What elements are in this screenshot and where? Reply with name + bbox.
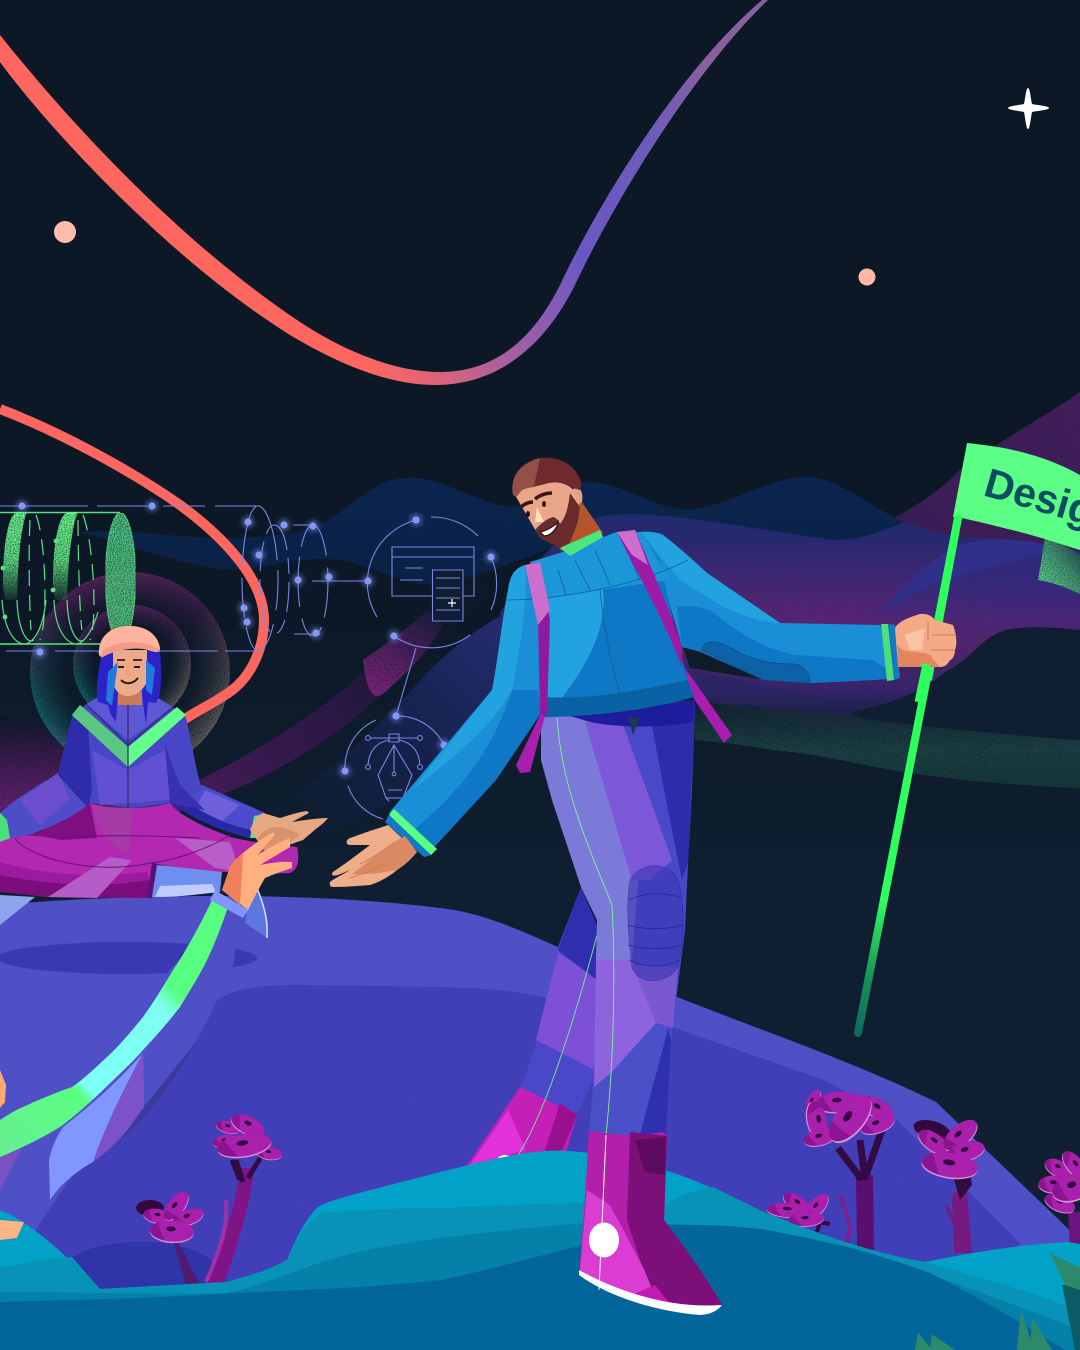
- man: head: [512, 458, 603, 556]
- boot highlight: [580, 1190, 655, 1298]
- grass spikes: [915, 1310, 1052, 1350]
- torso shade left: [58, 717, 92, 808]
- palm shade: [352, 836, 417, 874]
- front trouser leg: [541, 700, 695, 1135]
- green and cyan trailing ribbon: [0, 898, 228, 1157]
- boot dark back: [627, 1132, 722, 1307]
- right cuff edge: [888, 624, 900, 680]
- leg dark fold: [0, 875, 150, 898]
- yoke light: [530, 532, 670, 600]
- right strap highlight: [617, 530, 648, 565]
- mouth: [540, 522, 558, 536]
- guide lines: [0, 506, 320, 651]
- aura halos around the girl: [30, 572, 230, 750]
- fist shade: [897, 645, 940, 667]
- hair highlight: [106, 660, 155, 706]
- green haze band: [693, 703, 1080, 788]
- beard: [535, 493, 580, 548]
- grain on inner hill: [30, 985, 1020, 1350]
- foot speckle: [155, 884, 216, 897]
- eyebrow left: [520, 502, 533, 508]
- right sleeve top light: [640, 532, 780, 623]
- left sleeve: [389, 565, 545, 857]
- man: upper body: [385, 530, 900, 857]
- main violet-magenta wave: [500, 514, 1080, 735]
- sleeve light panel: [49, 1053, 144, 1200]
- fist highlight: [905, 628, 925, 650]
- left sleeve light: [412, 565, 526, 790]
- lower dark panel: [640, 1028, 671, 1135]
- eyebrow right: [535, 493, 552, 499]
- bright purple panel: [585, 722, 672, 880]
- back boot white dot: [495, 1155, 515, 1175]
- smile: [121, 678, 138, 683]
- back boot dark: [545, 1103, 577, 1155]
- girl: meditating figure: [0, 626, 328, 925]
- second coral ribbon: [0, 409, 264, 722]
- navy ridge: [80, 477, 905, 584]
- man: backpack strap lower: [685, 668, 732, 743]
- flag fold behind: [1038, 538, 1080, 594]
- back trouser leg: [520, 887, 597, 1115]
- left backpack strap: [525, 562, 550, 715]
- hip dark wedge: [25, 803, 97, 840]
- tree: large right: [802, 1086, 897, 1250]
- boot sole: [579, 1270, 722, 1315]
- dark pool on inner hill: [64, 1242, 216, 1298]
- teal foreground hills: [0, 1151, 1080, 1350]
- thumb lines: [350, 845, 392, 878]
- right sleeve: [640, 532, 900, 683]
- planet dot right: [858, 268, 876, 286]
- trees on right of hill: [766, 1086, 1080, 1253]
- inner halo: [73, 605, 191, 706]
- glowing nodes: [16, 500, 498, 778]
- bottom-left hand fragment upper: [0, 1070, 6, 1108]
- boot deepest shade: [635, 1137, 666, 1175]
- document icon: [432, 570, 463, 621]
- pink dome: [94, 805, 133, 855]
- wire cylinder ellipses: [242, 506, 278, 651]
- pen circle arcs: [345, 716, 444, 819]
- green stitch line: [557, 718, 614, 1135]
- white ankle button: [589, 1222, 619, 1258]
- lower left strap: [516, 715, 545, 773]
- boot toe magenta: [625, 1285, 675, 1310]
- face: [515, 482, 580, 548]
- foliage bottom right: [915, 1253, 1080, 1350]
- second person's reaching hand: [210, 832, 292, 938]
- hair: [512, 458, 581, 497]
- sleeve grey shadow: [120, 1043, 195, 1140]
- blue swell left of man: [265, 612, 520, 835]
- knee patch: [628, 866, 683, 981]
- palm and fingers: [330, 825, 417, 887]
- collar: [86, 680, 173, 740]
- back boot: [464, 1087, 577, 1170]
- leg light stripe: [48, 857, 132, 898]
- sleeve left purple fold: [0, 1148, 22, 1190]
- flag pole: [858, 518, 958, 1033]
- left cuff green: [389, 809, 437, 855]
- periwinkle wireframe diagram: [0, 506, 497, 819]
- seam lines: [505, 535, 688, 710]
- pen handle nodes: [366, 736, 422, 776]
- lilac right patch: [632, 965, 678, 1028]
- right backpack strap: [617, 530, 682, 668]
- hand shade: [222, 853, 243, 905]
- right cuff: [250, 814, 265, 838]
- dark hill right: [850, 627, 1080, 745]
- textured inner hill: [30, 985, 1020, 1350]
- coil outlines: [2, 600, 98, 644]
- back boot highlight: [470, 1110, 526, 1165]
- magenta wedge behind girl: [195, 575, 490, 800]
- back leg and boot: [464, 887, 597, 1175]
- dashed ellipses: [29, 515, 94, 640]
- background hills: [0, 392, 1080, 835]
- planet dot left: [54, 221, 76, 243]
- left foot panel: [0, 895, 35, 925]
- plant stem: [1062, 1285, 1080, 1350]
- white stitch: [599, 1135, 606, 1290]
- ankle: [147, 863, 158, 898]
- knee light: [175, 838, 240, 872]
- nose: [125, 664, 132, 675]
- leg base: [541, 700, 695, 1135]
- right cuff: [881, 624, 894, 681]
- tree: short left: [136, 1187, 206, 1285]
- lilac shin patch: [594, 960, 656, 1087]
- cuff light edge: [257, 888, 267, 938]
- left sleeve dark: [408, 690, 541, 857]
- hair back: [97, 648, 161, 725]
- left arm speckle: [20, 773, 70, 825]
- eyebrows: [117, 659, 142, 661]
- link line: [396, 648, 416, 716]
- green collar: [560, 530, 603, 556]
- front boot: [579, 1130, 722, 1315]
- pole over fist: [918, 664, 926, 702]
- left cuff: [0, 813, 10, 845]
- corner purple mountain: [880, 392, 1080, 640]
- chevron left shade: [72, 705, 128, 767]
- sleeve fold on hill: [0, 905, 235, 1240]
- spiky leaf top: [1050, 1253, 1080, 1290]
- man: hand on pole: [895, 614, 956, 702]
- top ribbon: coral to violet curve: [0, 0, 768, 385]
- left strap highlight: [525, 562, 550, 625]
- ear: [572, 488, 582, 506]
- left cuff band: [385, 815, 431, 857]
- zip line: [86, 700, 173, 852]
- torso jacket: [58, 704, 202, 808]
- cuff triangle: [245, 888, 268, 938]
- lower left magenta haze: [0, 715, 180, 830]
- finger lines: [928, 622, 955, 650]
- torso light panel: [540, 575, 604, 713]
- cylinder nodes: [1, 539, 58, 619]
- bottom-left hand fragment lower: [0, 1220, 24, 1240]
- inner lower blue: [589, 1023, 668, 1135]
- browser window icon: [392, 547, 474, 596]
- dark gap under arm: [682, 645, 765, 680]
- boot base: [579, 1130, 722, 1315]
- neck: [556, 495, 603, 551]
- green wireframe cylinder: [0, 512, 136, 644]
- trouser outline: [15, 835, 230, 867]
- right hand shade: [257, 827, 300, 853]
- hair highlight: [512, 458, 540, 497]
- magenta blob: [363, 610, 442, 696]
- outer halo: [30, 572, 230, 750]
- hat shade: [101, 642, 160, 658]
- back leg thread: [515, 935, 597, 1160]
- torso shade right: [165, 745, 205, 810]
- hand base: [222, 832, 292, 910]
- cylinder top and bottom rails: [0, 512, 120, 644]
- right arm lilac patch: [195, 790, 240, 825]
- sleeve purple overlay: [93, 1053, 144, 1162]
- face: [113, 650, 147, 696]
- periwinkle panel: [541, 714, 640, 960]
- dark right panel: [650, 705, 695, 880]
- right sleeve dark: [677, 606, 900, 683]
- corner mountain grain: [880, 392, 1080, 640]
- trees on left of hill: [136, 1110, 283, 1285]
- right arm dark hem: [170, 800, 252, 838]
- fist: [895, 614, 956, 667]
- right hand: [250, 811, 328, 853]
- dark tuck: [628, 717, 640, 735]
- flag cloth: [953, 443, 1080, 550]
- grain overlay on main wave: [640, 540, 1080, 700]
- star: white sparkle: [1008, 88, 1049, 129]
- coil bands: [3, 512, 78, 600]
- tree: far right: [1038, 1146, 1080, 1248]
- tree: tall left: [204, 1110, 283, 1285]
- man: reaching hand: [330, 825, 417, 887]
- white cursor plus: [448, 599, 456, 607]
- right arm: [160, 785, 265, 838]
- pole upper section: [928, 518, 958, 680]
- eyes: [118, 666, 140, 668]
- darkest teal base: [0, 1225, 1065, 1350]
- blue hill right: [875, 539, 1060, 615]
- tree: small hill tree: [766, 1189, 832, 1232]
- leg mid fold: [0, 862, 150, 885]
- back leg purple patch: [536, 952, 597, 1070]
- wrist cuff: [210, 890, 248, 918]
- lightest teal hill: [0, 1151, 1080, 1350]
- chevron green: [72, 705, 186, 767]
- elbow patch: [702, 642, 810, 683]
- torso centre purple: [92, 750, 170, 805]
- purple foreground hill: [0, 896, 1080, 1350]
- connector line: [312, 580, 368, 582]
- neck: [118, 692, 142, 705]
- mid teal layer: [0, 1187, 1080, 1350]
- flag on pole: [858, 443, 1080, 1033]
- nose: [535, 507, 544, 522]
- trailing translucent sleeve: [0, 905, 235, 1240]
- pen tool icon: [368, 734, 420, 801]
- speckled foot: [152, 865, 222, 897]
- tree: medium right: [911, 1114, 987, 1253]
- eyes: [526, 501, 546, 517]
- hips magenta: [0, 803, 298, 898]
- waistband dark: [543, 680, 694, 717]
- layout circle arcs: [367, 517, 497, 648]
- back leg dark shade: [558, 887, 597, 980]
- torso: [530, 532, 692, 715]
- dark waist shade: [570, 700, 695, 726]
- cylinder speckled end: [106, 513, 136, 643]
- deeper teal layer: [0, 1221, 1080, 1350]
- left arm: [0, 773, 90, 845]
- hat: [99, 626, 160, 657]
- hover shadow under girl: [0, 942, 257, 974]
- blue hill fade: [875, 540, 1080, 650]
